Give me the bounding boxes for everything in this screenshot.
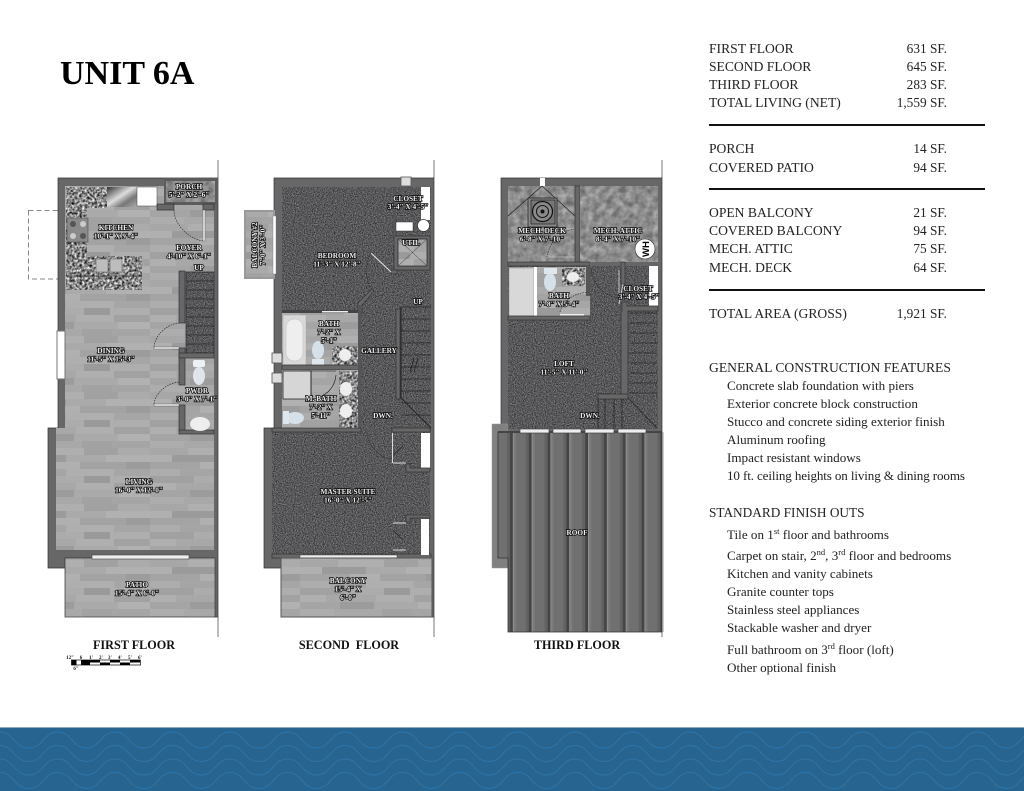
porch — [157, 178, 218, 241]
text block: standard finish outs: Kitchen and vanity cabinets — [727, 566, 873, 581]
text block: general construction features: Aluminum roofing — [727, 432, 826, 447]
mechanical deck — [508, 178, 580, 262]
master closets — [366, 428, 430, 555]
stairs — [179, 271, 214, 353]
scale bar: 1' — [89, 656, 94, 661]
window — [57, 331, 65, 379]
text block: general construction features: Exterior concrete block construction — [727, 396, 918, 411]
heading: first floor: FIRST FLOOR — [93, 638, 175, 652]
text block: general construction features: Impact resistant windows — [727, 450, 861, 465]
room label: foyer: 4'-10" X 6'-1" — [167, 252, 211, 260]
table: living areas: 631 SF. — [907, 41, 947, 56]
label: gallery: GALLERY — [361, 346, 398, 355]
room label: kitchen: 10'-1" X 9'-4" — [94, 232, 138, 240]
room label: balcony 2: 7'-0" X 3'-0" — [258, 225, 267, 265]
room label: utility: UTIL — [402, 238, 420, 247]
roof — [492, 424, 664, 632]
icon: water heater — [635, 239, 655, 259]
text block: standard finish outs: st — [774, 526, 780, 536]
table: balconies and mechanical: 64 SF. — [913, 260, 947, 275]
table: living areas: 645 SF. — [907, 59, 947, 74]
balcony 2 — [245, 211, 276, 278]
table: living areas — [709, 41, 985, 126]
room label: master suite: MASTER SUITE — [321, 487, 375, 496]
table: balconies and mechanical: MECH. DECK — [709, 260, 792, 275]
text block: standard finish outs: Full bathroom on 3 — [727, 642, 828, 657]
scale bar: 6' — [138, 656, 143, 661]
table: porch and patio: 14 SF. — [913, 141, 947, 156]
side windows — [272, 353, 282, 383]
total area — [709, 306, 947, 322]
room label: dining: DINING — [97, 346, 125, 355]
room label: bath: BATH — [549, 291, 569, 300]
room label: powder room: PWDR — [186, 386, 208, 395]
scale bar: 2' — [99, 656, 104, 661]
table: balconies and mechanical: 94 SF. — [913, 223, 947, 238]
text block: general construction features: Stucco and concrete siding exterior finish — [727, 414, 945, 429]
stairs — [396, 307, 431, 428]
scale bar: 4' — [118, 656, 123, 661]
room label: loft: 11'-5" X 11'-0" — [540, 368, 588, 376]
mechanical attic — [580, 186, 658, 262]
room label: balcony: BALCONY — [330, 576, 366, 585]
table: porch and patio: COVERED PATIO — [709, 160, 814, 175]
text block: standard finish outs: rd — [838, 547, 846, 557]
area: patio floor — [65, 558, 215, 617]
text block: standard finish outs: floor and bedrooms — [845, 548, 951, 563]
text block: standard finish outs: , 3 — [825, 548, 839, 563]
scale bar: 5' — [128, 656, 133, 661]
panel: second floor plan — [245, 160, 434, 637]
label: stairs up: UP — [194, 263, 204, 272]
room label: master bath: M. BATH — [306, 394, 336, 403]
bedroom door — [358, 253, 391, 313]
table: living areas: TOTAL LIVING (NET) — [709, 95, 841, 111]
label: water heater: WH — [641, 241, 652, 257]
room label: master suite: 16'-0" X 12'-5" — [324, 496, 372, 504]
stairs — [598, 313, 657, 429]
text block: standard finish outs: Tile on 1 — [727, 527, 774, 542]
text block: general construction features: 10 ft. ceiling heights on living & dining rooms — [727, 468, 965, 483]
room label: bedroom: 11'-3" X 12'-8" — [313, 260, 361, 268]
room label: patio: 15'-4" X 6'-0" — [115, 588, 159, 598]
utility closet — [391, 236, 430, 274]
text block: general construction features: Concrete slab foundation with piers — [727, 378, 914, 393]
room label: closet: 3'-4" X 4'-5" — [619, 292, 659, 301]
text block: standard finish outs: Granite counter tops — [727, 584, 834, 599]
panel: third floor plan — [492, 160, 664, 637]
master bathroom — [272, 305, 361, 432]
room label: bath: 5'-1" — [321, 336, 337, 345]
table: porch and patio: 94 SF. — [913, 160, 947, 175]
text block: general construction features: GENERAL CONSTRUCTION FEATURES — [709, 360, 951, 375]
room label: bath: 7'-2" X — [318, 328, 341, 336]
room label: closet: CLOSET — [393, 194, 423, 203]
text block: standard finish outs: nd — [817, 547, 826, 557]
table: balconies and mechanical: 21 SF. — [913, 205, 947, 220]
heading: second floor: SECOND FLOOR — [299, 638, 399, 652]
label: stairs down: DWN. — [373, 411, 393, 420]
room label: mech deck: 6'-8" X 7'-10" — [520, 234, 564, 244]
closet and laundry — [393, 187, 431, 235]
label: stairs up: UP — [413, 297, 423, 306]
footer wave banner — [0, 727, 1024, 791]
table: porch and patio — [709, 141, 985, 190]
room label: patio: PATIO — [126, 580, 148, 589]
bathroom — [282, 310, 361, 370]
table: living areas: SECOND FLOOR — [709, 59, 812, 74]
room label: balcony: 15'-4" X — [335, 584, 362, 594]
room label: kitchen: KITCHEN — [99, 223, 133, 232]
text block: standard finish outs: STANDARD FINISH OUTS — [709, 505, 865, 520]
room label: mech attic: 8'-4" X 7'-10" — [596, 234, 640, 244]
scale bar — [66, 656, 143, 672]
room label: porch: 5'-2" X 2'-6" — [169, 190, 209, 199]
text block: standard finish outs: Other optional finish — [727, 660, 837, 675]
scale bar: 3' — [108, 656, 113, 661]
table: living areas: THIRD FLOOR — [709, 77, 799, 92]
room label: bath: BATH — [319, 319, 339, 328]
heading: third floor: THIRD FLOOR — [534, 638, 620, 652]
room label: mech deck: MECH. DECK — [518, 226, 566, 235]
panel: first floor plan — [28, 160, 218, 637]
room label: loft: LOFT — [554, 359, 574, 368]
text block: standard finish outs: Stainless steel appliances — [727, 602, 859, 617]
room label: master bath: 7'-2" X — [310, 402, 333, 412]
room label: bedroom: BEDROOM — [318, 251, 356, 260]
scale bar: 12" — [66, 656, 74, 661]
title: UNIT 6A — [60, 55, 195, 92]
kitchen cabinets and counters — [66, 187, 157, 290]
loft bath — [508, 262, 590, 320]
total area: TOTAL AREA (GROSS) — [709, 306, 847, 322]
scale bar: 6" — [73, 667, 79, 672]
table: living areas: 1,559 SF. — [897, 95, 947, 110]
scale bar: 6 — [80, 656, 83, 661]
room label: foyer: FOYER — [176, 243, 202, 252]
table: living areas: FIRST FLOOR — [709, 41, 795, 56]
room label: master bath: 5'-11" — [311, 411, 331, 420]
table: balconies and mechanical: MECH. ATTIC — [709, 241, 793, 256]
room label: mech attic: MECH. ATTIC — [594, 226, 642, 235]
text block: standard finish outs — [709, 505, 951, 675]
text block: standard finish outs: rd — [828, 641, 836, 651]
room label: living: LIVING — [126, 477, 152, 486]
table: balconies and mechanical: 75 SF. — [913, 241, 947, 256]
text block: standard finish outs: Stackable washer and dryer — [727, 620, 872, 635]
text block: standard finish outs: floor and bathrooms — [779, 527, 889, 542]
text block: standard finish outs: Carpet on stair, 2 — [727, 548, 817, 563]
room label: balcony: 6'-0" — [340, 593, 356, 602]
text block: standard finish outs: floor (loft) — [835, 642, 894, 657]
room label: powder room: 3'-0" X 7'-1" — [177, 394, 217, 404]
table: balconies and mechanical: OPEN BALCONY — [709, 205, 814, 220]
room label: closet: CLOSET — [623, 284, 653, 293]
label: stairs down: DWN. — [580, 411, 600, 420]
table: living areas: 283 SF. — [907, 77, 947, 92]
label: roof: ROOF — [566, 528, 588, 537]
room label: dining: 11'-5" X 15'-3" — [87, 354, 135, 364]
room label: closet: 3'-4" X 4'-5" — [388, 202, 428, 211]
total area: 1,921 SF. — [897, 306, 947, 321]
room label: balcony 2: BALCONY #2 — [250, 222, 259, 268]
table: balconies and mechanical: COVERED BALCONY — [709, 223, 842, 238]
room label: living: 16'-0" X 12'-0" — [115, 486, 163, 494]
table: balconies and mechanical — [709, 205, 985, 291]
area: balcony floor — [281, 558, 432, 617]
room label: porch: PORCH — [176, 182, 202, 191]
table: porch and patio: PORCH — [709, 141, 755, 156]
powder room — [154, 323, 214, 434]
text block: general construction features — [709, 360, 965, 483]
windows — [520, 429, 646, 433]
closet — [590, 262, 658, 398]
room label: bath: 7'-8" X 5'-4" — [539, 300, 579, 308]
top window — [401, 177, 411, 186]
